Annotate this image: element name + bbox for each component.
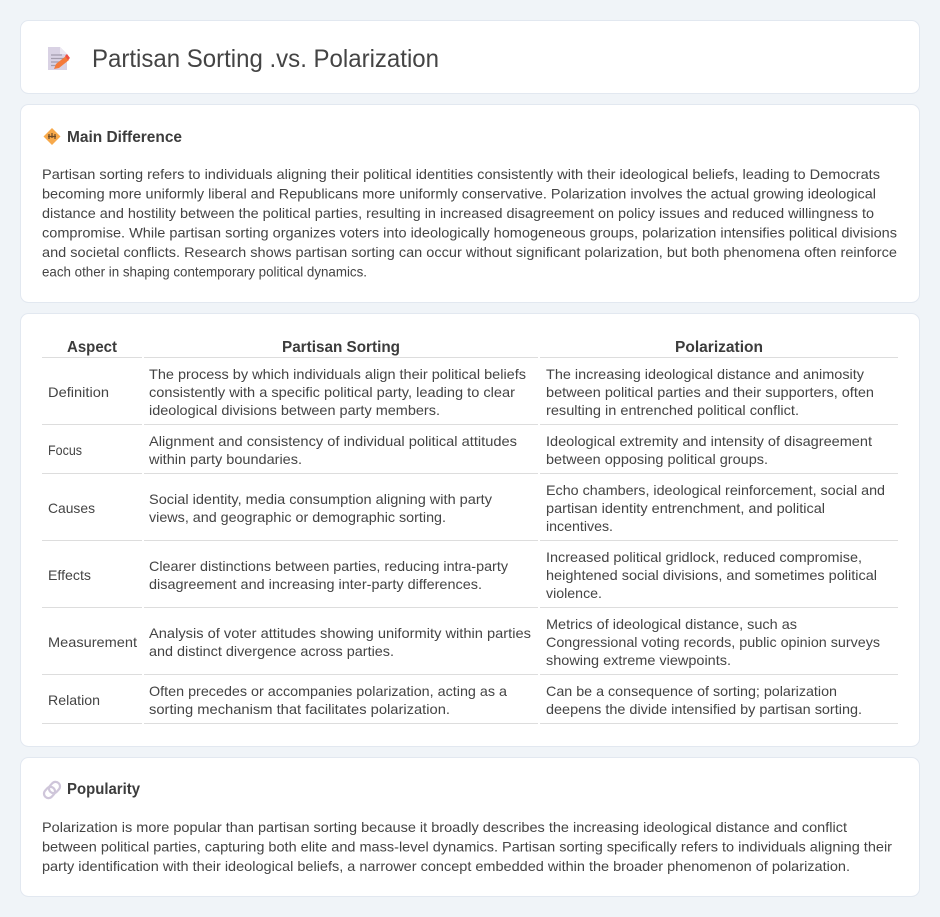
text block: main difference paragraph: and societal conflicts. Research shows partisan sorting can occur without significant polarization, but both phenomena often reinforce bbox=[42, 244, 897, 260]
text block: popularity paragraph: between political parties, capturing both elite and mass-level dynamics. Partisan sorting specifically refers to individuals aligning their bbox=[42, 838, 892, 854]
text block: main difference paragraph: Partisan sorting refers to individuals aligning their political identities consistently with their ideological beliefs, leading to Democrats bbox=[42, 166, 880, 182]
row: definition: Definition bbox=[48, 384, 109, 400]
icon: diamond road sign bbox=[44, 128, 60, 145]
row: effects: Clearer distinctions between parties, reducing intra-party bbox=[149, 558, 508, 574]
heading: main difference: Main Difference bbox=[67, 129, 182, 146]
row: causes: views, and geographic or demographic sorting. bbox=[149, 509, 446, 525]
row: effects: Increased political gridlock, reduced compromise, bbox=[546, 549, 862, 565]
row: causes: partisan identity entrenchment, and political bbox=[546, 500, 825, 516]
text block: main difference paragraph bbox=[42, 166, 897, 280]
row: measurement bbox=[48, 616, 880, 668]
text block: main difference paragraph: compromise. While partisan sorting organizes voters into ideologically homogeneous groups, polarization intensifies political divisions bbox=[42, 224, 897, 240]
row: relation: Often precedes or accompanies polarization, acting as a bbox=[149, 683, 507, 699]
text block: popularity paragraph: Polarization is more popular than partisan sorting because it broadly describes the increasing ideological distance and conflict bbox=[42, 819, 847, 835]
text block: main difference paragraph: distance and hostility between the political parties, resulting in increased disagreement on policy issues and reduced willingness to bbox=[42, 205, 874, 221]
row: measurement: Analysis of voter attitudes showing uniformity within parties bbox=[149, 625, 531, 641]
row: definition: consistently with a specific political party, leading to clear bbox=[149, 384, 515, 400]
row: relation: Relation bbox=[48, 692, 100, 708]
row: effects bbox=[48, 549, 877, 601]
row: definition: ideological divisions between party members. bbox=[149, 402, 440, 418]
row: focus: Alignment and consistency of individual political attitudes bbox=[149, 433, 517, 449]
row: measurement: Congressional voting records, public opinion surveys bbox=[546, 634, 880, 650]
row: definition: The process by which individuals align their political beliefs bbox=[149, 366, 526, 382]
row: measurement: showing extreme viewpoints. bbox=[546, 652, 731, 668]
row: measurement: Metrics of ideological distance, such as bbox=[546, 616, 797, 632]
text block: popularity paragraph: party identification with their ideological beliefs, a narrower concept embedded within the broader phenomenon of polarization. bbox=[42, 858, 850, 874]
panel: page header bbox=[20, 20, 920, 94]
row: focus: between opposing political groups. bbox=[546, 451, 768, 467]
row: focus: within party boundaries. bbox=[148, 451, 302, 467]
table header row: Polarization bbox=[675, 339, 763, 356]
title: Partisan Sorting .vs. Polarization bbox=[92, 45, 439, 73]
table header row: Aspect bbox=[67, 339, 118, 356]
text block: main difference paragraph: becoming more uniformly liberal and Republicans more uniformly conservative. Polarization involves the actual growing ideological bbox=[42, 186, 876, 202]
row: measurement: Measurement bbox=[48, 634, 137, 650]
row: causes: Causes bbox=[48, 500, 95, 516]
row: definition: resulting in entrenched political conflict. bbox=[546, 402, 799, 418]
row: measurement: and distinct divergence across parties. bbox=[149, 643, 394, 659]
row: causes bbox=[48, 482, 885, 534]
row: definition bbox=[48, 366, 874, 418]
row: relation: Can be a consequence of sorting; polarization bbox=[546, 683, 837, 699]
icon: document with pencil bbox=[48, 47, 70, 70]
row: causes: incentives. bbox=[546, 518, 613, 534]
row: effects: disagreement and increasing inter-party differences. bbox=[149, 576, 482, 592]
icon: chain link bbox=[42, 780, 62, 800]
table header row bbox=[67, 339, 763, 356]
table header row: Partisan Sorting bbox=[282, 339, 400, 356]
row: definition: The increasing ideological distance and animosity bbox=[546, 366, 864, 382]
row: focus: Focus bbox=[48, 442, 82, 458]
heading: popularity: Popularity bbox=[67, 781, 140, 798]
panel: popularity bbox=[20, 758, 920, 896]
row: definition: between political parties and their supporters, often bbox=[546, 384, 874, 400]
panel: comparison table bbox=[20, 314, 920, 746]
panel: main difference bbox=[20, 104, 920, 302]
row: effects: heightened social divisions, and sometimes political bbox=[546, 567, 877, 583]
row: effects: Effects bbox=[48, 567, 91, 583]
text block: main difference paragraph: each other in shaping contemporary political dynamics. bbox=[42, 264, 367, 280]
row: relation: sorting mechanism that facilitates polarization. bbox=[149, 701, 450, 717]
row: causes: Social identity, media consumption aligning with party bbox=[149, 491, 492, 507]
row: causes: Echo chambers, ideological reinforcement, social and bbox=[546, 482, 885, 498]
row: focus: Ideological extremity and intensity of disagreement bbox=[546, 433, 872, 449]
row: effects: violence. bbox=[546, 585, 602, 601]
row: relation bbox=[48, 683, 862, 717]
row: focus bbox=[48, 433, 872, 467]
row: relation: deepens the divide intensified by partisan sorting. bbox=[546, 701, 862, 717]
text block: popularity paragraph bbox=[42, 819, 892, 874]
